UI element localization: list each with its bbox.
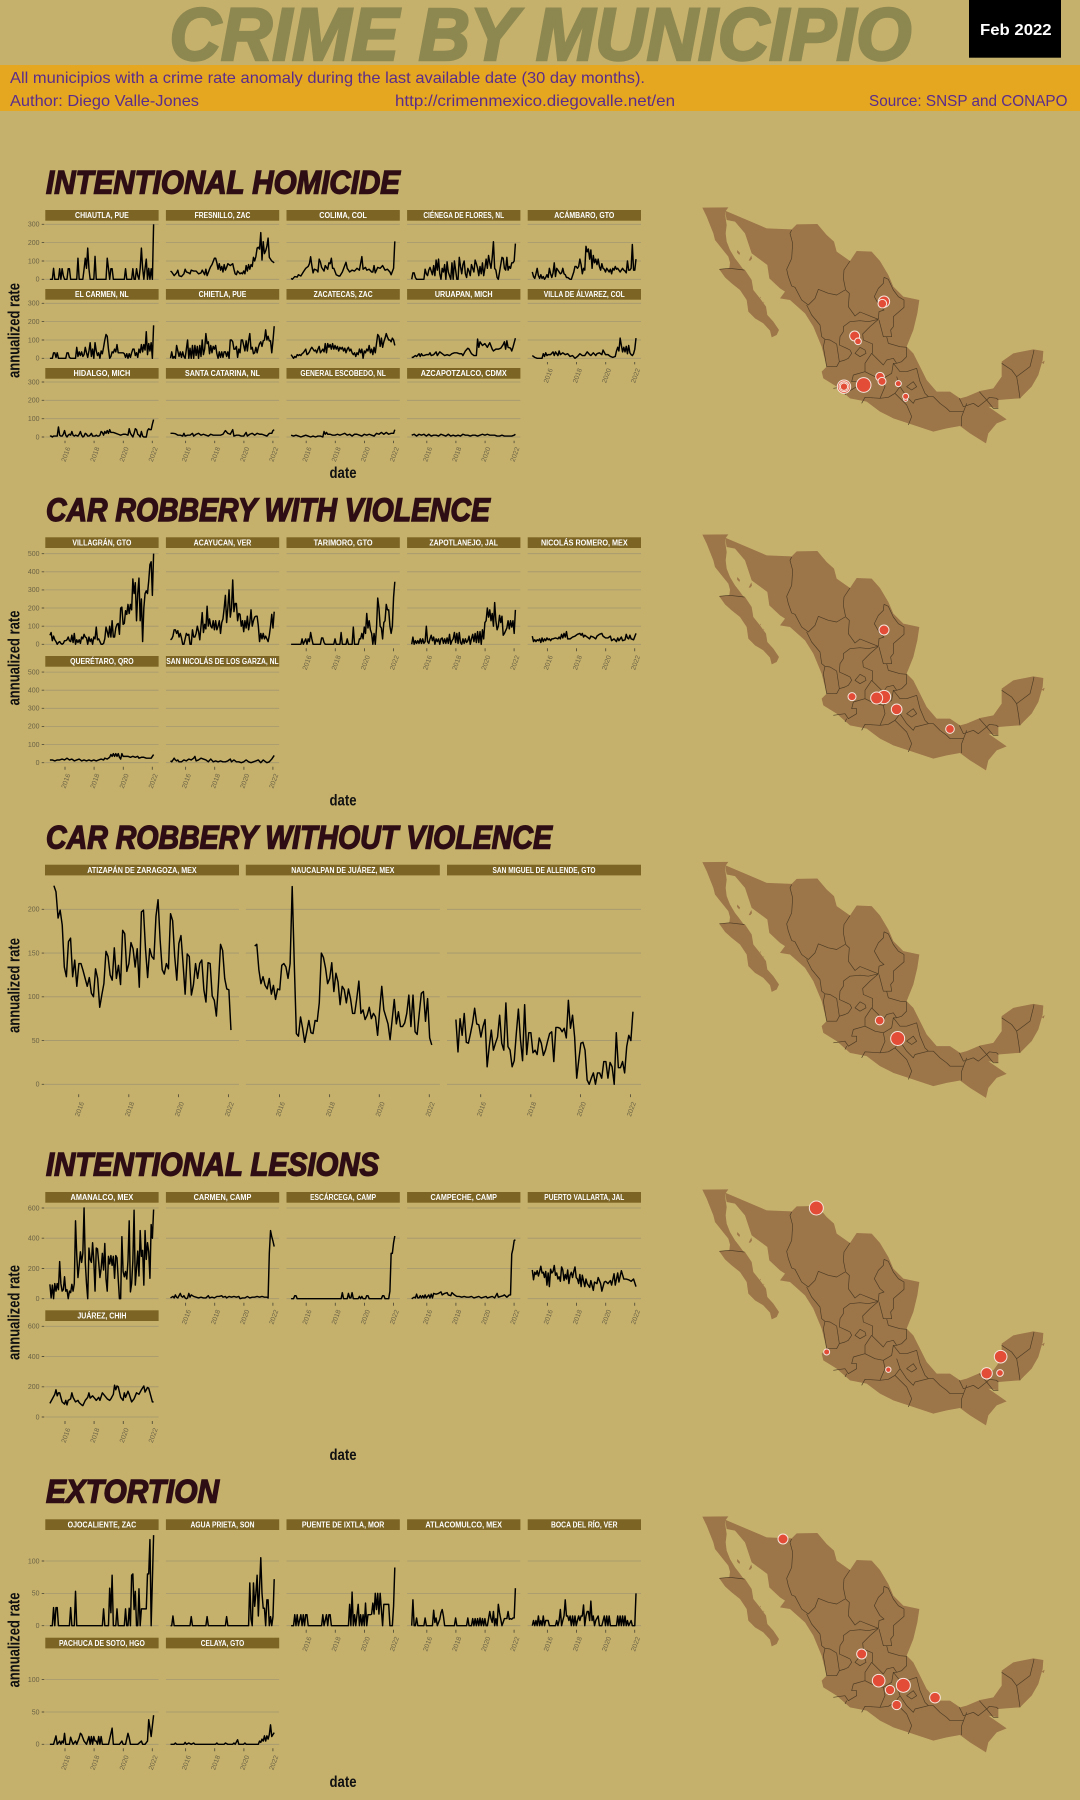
y axis row 1: 200 (28, 605, 40, 612)
panel: Zapotlanejo: ZAPOTLANEJO, JAL (429, 538, 498, 547)
panel: Villagran (45, 537, 159, 644)
y axis row 2: 50 (32, 1709, 40, 1716)
panel: Villa de Alvarez: VILLA DE ÁLVAREZ, COL (544, 290, 625, 299)
panel: Nicolas Romero: NICOLÁS ROMERO, MEX (541, 538, 628, 547)
panel: Atlacomulco: 2022 (510, 1636, 522, 1653)
y axis row 2: 0 (36, 1414, 40, 1421)
panel: Carmen: 2016 (181, 1309, 193, 1326)
y axis title: annualized rate (4, 938, 24, 1033)
panel: Puerto Vallarta (528, 1192, 642, 1326)
y axis row 2: 600 (28, 1324, 40, 1331)
y axis: 100 (28, 994, 40, 1001)
x axis title: date (330, 1447, 357, 1464)
panel: Juarez: 2018 (90, 1427, 102, 1444)
panel: Nicolas Romero (528, 537, 642, 671)
panel: Juarez: 2016 (61, 1427, 72, 1444)
x axis title: date (330, 465, 357, 482)
y axis row 2: 200 (28, 724, 40, 731)
panel: Hidalgo: 2022 (148, 446, 160, 463)
panel: Nicolas Romero: 2016 (543, 654, 555, 671)
panel: Carmen: 2022 (269, 1309, 280, 1326)
panel: Queretaro: QUERÉTARO, QRO (70, 657, 134, 666)
y axis row 1 (28, 1205, 44, 1303)
y axis row 1: 200 (28, 1266, 40, 1273)
panel: Naucalpan de Juarez: 2016 (275, 1101, 287, 1118)
panel: General Escobedo: 2016 (302, 446, 314, 463)
panel: Boca del Rio: 2016 (543, 1636, 555, 1653)
panel: Atizapan de Zaragoza: 2016 (74, 1101, 86, 1118)
section: intentional lesions (4, 1146, 1045, 1464)
heading: car robbery with violence: CAR ROBBERY WITH VIOLENCE (46, 492, 491, 528)
y axis row 3 (28, 379, 44, 441)
panel: Puerto Vallarta: 2022 (630, 1309, 642, 1326)
y axis row 1 (28, 551, 44, 649)
panel: Boca del Rio: 2020 (601, 1636, 613, 1653)
panel: Escarcega: 2020 (360, 1309, 372, 1326)
panel: Cienega de Flores (407, 210, 520, 279)
panel: Celaya: 2020 (240, 1754, 251, 1771)
panel: Naucalpan de Juarez: 2018 (325, 1101, 337, 1118)
panel: Hidalgo: 2020 (119, 446, 131, 463)
y axis row 2: 200 (28, 1384, 40, 1391)
panel: Agua Prieta: AGUA PRIETA, SON (190, 1520, 255, 1529)
subtitle band: All municipios with a crime rate anomaly during the last available date (30 day months). (10, 70, 645, 87)
panel: Nicolas Romero: 2018 (572, 654, 584, 671)
panel: San Miguel de Allende: 2016 (476, 1101, 488, 1118)
section: car robbery with violence (4, 492, 1045, 810)
y axis row 1: 100 (28, 623, 40, 630)
subtitle band: http://crimenmexico.diegovalle.net/en (395, 93, 675, 110)
panel: Azcapotzalco: 2020 (481, 446, 493, 463)
y axis row 1: 500 (28, 551, 40, 558)
panel: Zapotlanejo: 2020 (481, 654, 493, 671)
y axis row 2: 0 (36, 760, 40, 767)
y axis row 2: 100 (28, 1677, 40, 1684)
heading: intentional homicide: INTENTIONAL HOMICIDE (46, 164, 402, 200)
panel: Tarimoro: 2022 (389, 654, 401, 671)
panel: Puente de Ixtla: 2018 (331, 1636, 343, 1653)
panel: Celaya (166, 1638, 280, 1771)
panel: Puente de Ixtla: 2022 (389, 1636, 401, 1653)
y axis row 1: 400 (28, 569, 40, 576)
panel: Campeche: 2020 (481, 1309, 493, 1326)
y axis row 1 (28, 1558, 44, 1630)
panel: Hidalgo: 2018 (90, 446, 102, 463)
panel: Queretaro: 2020 (119, 773, 131, 790)
panel: Tarimoro: TARIMORO, GTO (314, 538, 373, 547)
panel: San Nicolas de los Garza: 2020 (240, 773, 251, 790)
date badge (969, 0, 1061, 58)
y axis row 2: 400 (28, 688, 40, 695)
panel: Atlacomulco: 2018 (452, 1636, 463, 1653)
y axis row 1: 50 (32, 1591, 40, 1598)
y axis row 2 (28, 1677, 44, 1749)
panel: Fresnillo: FRESNILLO, ZAC (195, 211, 251, 220)
section: extortion (4, 1474, 1045, 1791)
panel: Tarimoro (286, 537, 401, 671)
panel: Naucalpan de Juarez: NAUCALPAN DE JUÁREZ, MEX (291, 866, 395, 875)
panel: Boca del Rio (528, 1519, 642, 1653)
panel: Juarez (45, 1310, 160, 1444)
panel: Zapotlanejo: 2016 (422, 654, 434, 671)
panel: General Escobedo: GENERAL ESCOBEDO, NL (300, 369, 386, 378)
panel: Puente de Ixtla: 2016 (302, 1636, 314, 1653)
panel: Pachuca de Soto: PACHUCA DE SOTO, HGO (59, 1639, 145, 1648)
panel: San Nicolas de los Garza: 2016 (181, 773, 193, 790)
panel: Santa Catarina (166, 368, 280, 463)
panel: Atizapan de Zaragoza: 2020 (174, 1101, 186, 1118)
heading: car robbery without violence: CAR ROBBERY WITHOUT VIOLENCE (46, 820, 553, 856)
y axis row 3: 300 (28, 379, 40, 386)
panel: Azcapotzalco (407, 368, 522, 463)
panel: Chiautla (45, 210, 159, 279)
panel: Queretaro: 2016 (61, 773, 72, 790)
y axis row 2: 0 (36, 1742, 40, 1749)
panel: Hidalgo: HIDALGO, MICH (74, 369, 130, 378)
y axis: 0 (36, 1082, 40, 1089)
panel: San Miguel de Allende: 2018 (526, 1101, 538, 1118)
panel: Tarimoro: 2018 (331, 654, 343, 671)
panel: Juarez: JUÁREZ, CHIH (77, 1311, 127, 1320)
panel: Tarimoro: 2016 (302, 654, 314, 671)
y axis row 1: 0 (36, 1623, 40, 1630)
panel: Colima: COLIMA, COL (319, 211, 367, 220)
panel: Zacatecas: ZACATECAS, ZAC (314, 290, 373, 299)
panel: Ojocaliente (45, 1519, 159, 1626)
map: intentional homicide (702, 207, 1045, 443)
panel: Nicolas Romero: 2020 (601, 654, 613, 671)
y axis row 3: 100 (28, 416, 40, 423)
panel: Boca del Rio: 2022 (630, 1636, 642, 1653)
panel: Zapotlanejo: 2022 (510, 654, 522, 671)
panel: San Nicolas de los Garza: 2022 (269, 773, 280, 790)
panel: Carmen: 2020 (240, 1309, 251, 1326)
y axis row 2: 100 (28, 742, 40, 749)
panel: Acayucan (166, 537, 279, 644)
panel: Villa de Alvarez (528, 289, 642, 384)
panel: Pachuca de Soto: 2018 (90, 1754, 102, 1771)
panel: Campeche: 2016 (422, 1309, 434, 1326)
panel: Cienega de Flores: CIÉNEGA DE FLORES, NL (423, 211, 504, 220)
panel: Queretaro: 2022 (148, 773, 160, 790)
panel: Escarcega: 2016 (302, 1309, 314, 1326)
panel: Uruapan (407, 289, 520, 358)
y axis title: annualized rate (4, 283, 24, 378)
panel: Ojocaliente: OJOCALIENTE, ZAC (68, 1520, 136, 1529)
y axis row 2: 400 (28, 1354, 40, 1361)
panel: General Escobedo: 2020 (360, 446, 372, 463)
panel: Uruapan: URUAPAN, MICH (435, 290, 493, 299)
panel: Naucalpan de Juarez: 2020 (375, 1101, 387, 1118)
panel: Atizapan de Zaragoza: 2018 (124, 1101, 136, 1118)
section: intentional homicide (4, 164, 1045, 482)
panel: Nicolas Romero: 2022 (630, 654, 642, 671)
panel: Tarimoro: 2020 (360, 654, 372, 671)
y axis row 2 (28, 1324, 44, 1421)
panel: Chietla (166, 289, 279, 358)
panel: Campeche (407, 1192, 522, 1326)
date badge: Feb 2022 (980, 22, 1052, 39)
x axis title: date (330, 1774, 357, 1791)
panel: San Nicolas de los Garza: SAN NICOLÁS DE LOS GARZA, NL (166, 657, 279, 666)
panel: Queretaro: 2018 (90, 773, 102, 790)
panel: Carmen (166, 1192, 280, 1326)
y axis row 1: 300 (28, 222, 40, 229)
panel: Puerto Vallarta: 2018 (572, 1309, 584, 1326)
panel: San Miguel de Allende: SAN MIGUEL DE ALLENDE, GTO (492, 866, 596, 875)
y axis row 1: 0 (36, 277, 40, 284)
panel: Puerto Vallarta: PUERTO VALLARTA, JAL (544, 1193, 624, 1202)
panel: San Miguel de Allende (447, 865, 641, 1118)
map: intentional lesions (702, 1189, 1045, 1425)
y axis row 2: 300 (28, 301, 40, 308)
panel: Puente de Ixtla: PUENTE DE IXTLA, MOR (302, 1520, 385, 1529)
panel: Azcapotzalco: 2016 (422, 446, 434, 463)
panel: San Miguel de Allende: 2022 (626, 1101, 638, 1118)
panel: Santa Catarina: SANTA CATARINA, NL (185, 369, 260, 378)
y axis row 3: 0 (36, 434, 40, 441)
panel: Villa de Alvarez: 2022 (630, 367, 642, 384)
panel: Escarcega (286, 1192, 401, 1326)
y axis: 150 (28, 950, 40, 957)
x axis title: date (330, 792, 357, 810)
panel: Zacatecas (286, 289, 400, 358)
y axis row 1 (28, 222, 44, 284)
panel: Hidalgo: 2016 (61, 446, 72, 463)
panel: Villa de Alvarez: 2020 (601, 367, 613, 384)
panel: Carmen: 2018 (210, 1309, 222, 1326)
y axis row 1: 0 (36, 642, 40, 649)
panel: San Nicolas de los Garza: 2018 (210, 773, 222, 790)
panel: Atizapan de Zaragoza (45, 865, 239, 1118)
panel: Atlacomulco (407, 1519, 522, 1653)
y axis (28, 907, 44, 1089)
map: extortion (702, 1516, 1045, 1752)
panel: Atlacomulco: ATLACOMULCO, MEX (425, 1520, 503, 1529)
heading: extortion: EXTORTION (46, 1474, 220, 1510)
panel: Puerto Vallarta: 2020 (601, 1309, 613, 1326)
y axis row 2 (28, 301, 44, 363)
panel: Queretaro (45, 656, 160, 790)
panel: San Miguel de Allende: 2020 (576, 1101, 588, 1118)
y axis row 2 (28, 669, 44, 767)
panel: Santa Catarina: 2018 (210, 446, 222, 463)
panel: Escarcega: 2022 (389, 1309, 401, 1326)
panel: Celaya: 2016 (181, 1754, 193, 1771)
panel: Pachuca de Soto (45, 1638, 160, 1771)
panel: San Nicolas de los Garza (166, 656, 280, 790)
panel: General Escobedo: 2018 (331, 446, 343, 463)
section: car robbery without violence (4, 820, 1045, 1118)
panel: Atizapan de Zaragoza: ATIZAPÁN DE ZARAGOZA, MEX (87, 866, 197, 875)
panel: Campeche: 2022 (510, 1309, 522, 1326)
panel: Carmen: CARMEN, CAMP (194, 1193, 252, 1202)
y axis: 50 (32, 1038, 40, 1045)
panel: Juarez: 2022 (148, 1427, 160, 1444)
panel: Atizapan de Zaragoza: 2022 (224, 1101, 236, 1118)
panel: Pachuca de Soto: 2022 (148, 1754, 160, 1771)
subtitle band: Author: Diego Valle-Jones (10, 93, 199, 110)
panel: Campeche: 2018 (452, 1309, 463, 1326)
y axis row 3: 200 (28, 398, 40, 405)
panel: Puerto Vallarta: 2016 (543, 1309, 555, 1326)
map: car robbery with violence (702, 534, 1045, 770)
heading: intentional lesions: INTENTIONAL LESIONS (46, 1146, 380, 1182)
panel: Pachuca de Soto: 2016 (61, 1754, 72, 1771)
panel: Juarez: 2020 (119, 1427, 131, 1444)
panel: Fresnillo (166, 210, 279, 279)
subtitle band (0, 65, 1080, 111)
panel: Villagran: VILLAGRÁN, GTO (72, 538, 131, 547)
y axis row 1: 300 (28, 587, 40, 594)
panel: Agua Prieta (166, 1519, 279, 1626)
panel: Escarcega: ESCÁRCEGA, CAMP (310, 1193, 377, 1202)
y axis row 1: 100 (28, 1558, 40, 1565)
y axis row 1: 600 (28, 1205, 40, 1212)
panel: Azcapotzalco: 2018 (452, 446, 463, 463)
panel: Acayucan: ACAYUCAN, VER (194, 538, 252, 547)
panel: Puente de Ixtla (286, 1519, 401, 1653)
y axis title: annualized rate (4, 610, 24, 706)
panel: Acambaro (528, 210, 641, 279)
y axis row 1: 0 (36, 1296, 40, 1303)
panel: Boca del Rio: BOCA DEL RÍO, VER (551, 1520, 618, 1529)
panel: Celaya: 2022 (269, 1754, 280, 1771)
panel: Villa de Alvarez: 2018 (572, 367, 584, 384)
y axis row 2: 300 (28, 706, 40, 713)
panel: Puente de Ixtla: 2020 (360, 1636, 372, 1653)
panel: Azcapotzalco: 2022 (510, 446, 522, 463)
panel: Villa de Alvarez: 2016 (543, 367, 555, 384)
y axis row 2: 100 (28, 337, 40, 344)
panel: Santa Catarina: 2016 (181, 446, 193, 463)
panel: Atlacomulco: 2020 (481, 1636, 493, 1653)
panel: Santa Catarina: 2020 (240, 446, 251, 463)
panel: Celaya: CELAYA, GTO (201, 1639, 244, 1648)
panel: Campeche: CAMPECHE, CAMP (430, 1193, 498, 1202)
map: car robbery without violence (702, 862, 1045, 1098)
y axis row 1: 100 (28, 258, 40, 265)
panel: Amanalco: AMANALCO, MEX (71, 1193, 134, 1202)
y axis title: annualized rate (4, 1592, 24, 1688)
panel: General Escobedo: 2022 (389, 446, 401, 463)
panel: Boca del Rio: 2018 (572, 1636, 584, 1653)
subtitle band: Source: SNSP and CONAPO (869, 93, 1068, 110)
panel: General Escobedo (286, 368, 401, 463)
panel: Naucalpan de Juarez (246, 865, 440, 1118)
y axis row 1: 200 (28, 240, 40, 247)
panel: Zapotlanejo (407, 537, 522, 671)
y axis: 200 (28, 907, 40, 914)
panel: Azcapotzalco: AZCAPOTZALCO, CDMX (421, 369, 507, 378)
y axis row 2: 200 (28, 319, 40, 326)
panel: Chietla: CHIETLA, PUE (199, 290, 247, 299)
panel: Santa Catarina: 2022 (269, 446, 280, 463)
panel: Hidalgo (45, 368, 160, 463)
panel: El Carmen: EL CARMEN, NL (75, 290, 129, 299)
panel: Zapotlanejo: 2018 (452, 654, 463, 671)
panel: El Carmen (45, 289, 159, 358)
panel: Atlacomulco: 2016 (422, 1636, 434, 1653)
panel: Celaya: 2018 (210, 1754, 222, 1771)
panel: Chiautla: CHIAUTLA, PUE (75, 211, 129, 220)
panel: Colima (286, 210, 400, 279)
panel: Amanalco (45, 1192, 159, 1299)
y axis title: annualized rate (4, 1265, 24, 1360)
y axis row 2: 500 (28, 669, 40, 676)
panel: Pachuca de Soto: 2020 (119, 1754, 131, 1771)
panel: Naucalpan de Juarez: 2022 (425, 1101, 437, 1118)
panel: Acambaro: ACÁMBARO, GTO (554, 211, 614, 220)
y axis row 2: 0 (36, 356, 40, 363)
panel: Escarcega: 2018 (331, 1309, 343, 1326)
y axis row 1: 400 (28, 1235, 40, 1242)
